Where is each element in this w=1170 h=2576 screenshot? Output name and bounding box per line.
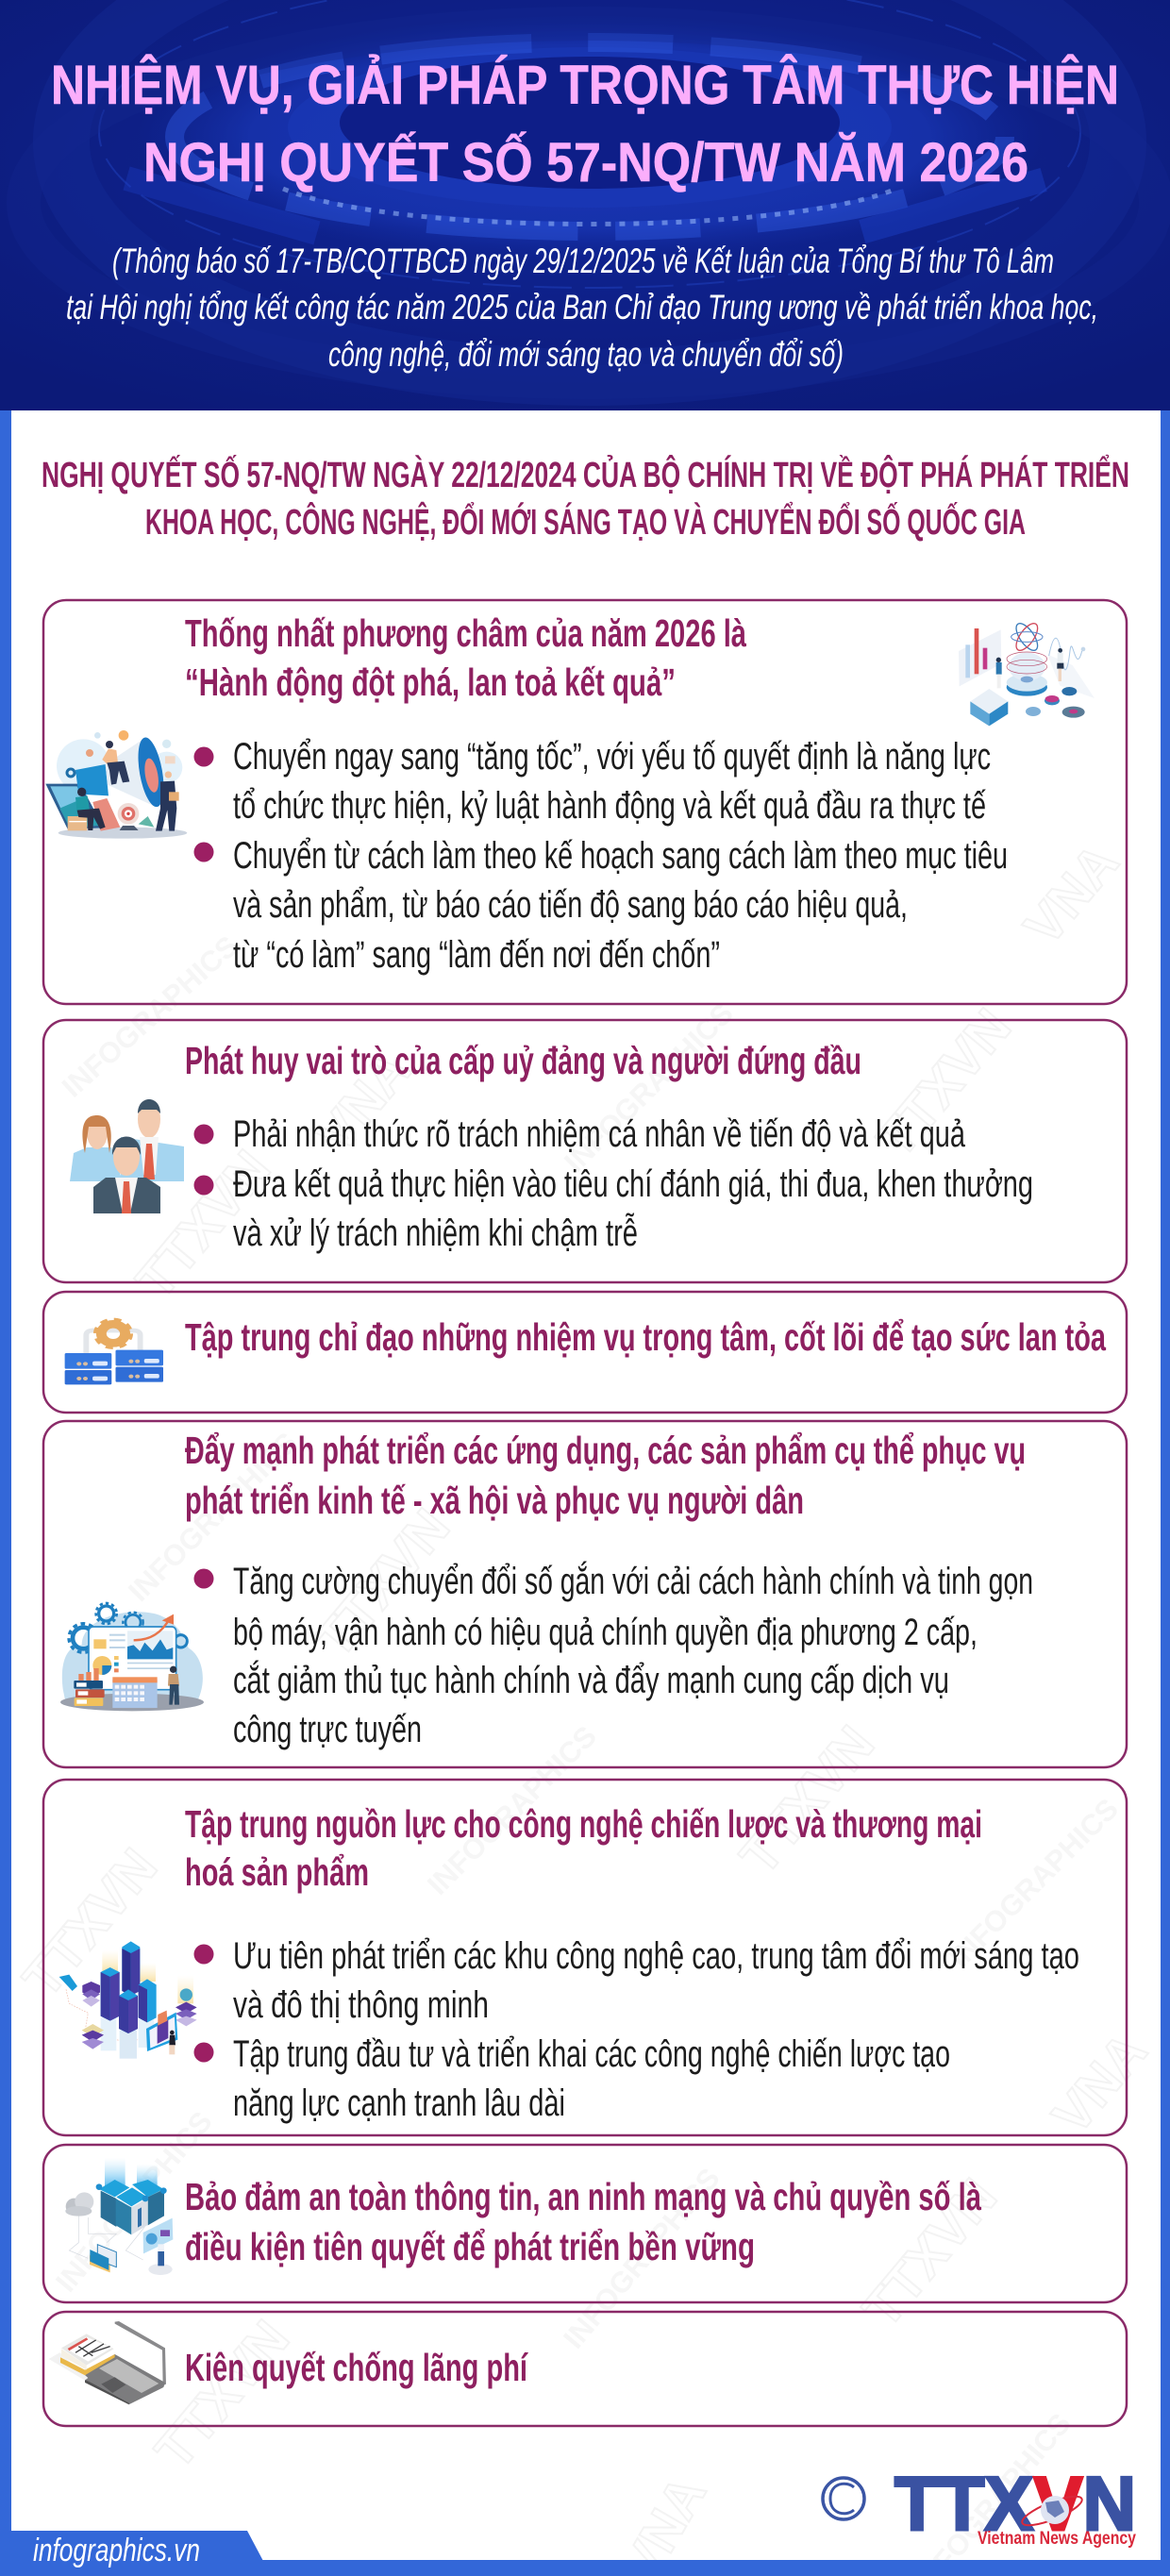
main title: NGHỊ QUYẾT SỐ 57-NQ/TW NĂM 2026 xyxy=(143,132,1028,193)
watermark pattern: INFOGRAPHICS xyxy=(56,929,244,1104)
panel 1 bullets xyxy=(194,736,1008,976)
panel 6 heading: điều kiện tiên quyết để phát triển bền vững xyxy=(185,2225,755,2268)
panel 6: an toàn thông tin xyxy=(43,2145,1127,2302)
panel 1 bullets: từ “có làm” sang “làm đến nơi đến chốn” xyxy=(233,934,720,976)
panel 4 heading: phát triển kinh tế - xã hội và phục vụ người dân xyxy=(185,1479,804,1522)
icon: smart city towers xyxy=(59,1941,197,2059)
watermark pattern: TTXVN xyxy=(728,1715,885,1885)
logo tagline: Vietnam News Agency xyxy=(978,2529,1136,2549)
icon: data center security xyxy=(65,2158,173,2275)
panel 1 heading: “Hành động đột phá, lan toả kết quả” xyxy=(185,661,676,704)
watermark pattern: INFOGRAPHICS xyxy=(557,2162,727,2355)
watermark pattern: INFOGRAPHICS xyxy=(943,1792,1125,1974)
icon: megaphone team xyxy=(45,730,187,839)
watermark pattern: TTXVN xyxy=(865,997,1022,1168)
main title xyxy=(51,55,1119,193)
logo globe xyxy=(1019,2491,1085,2531)
panel 5: công nghệ chiến lược xyxy=(43,1780,1127,2135)
icon: science platform xyxy=(959,620,1095,726)
copyright symbol xyxy=(823,2478,864,2519)
icon: servers and gear xyxy=(65,1320,163,1384)
TTXVN logo: TTXVN xyxy=(894,2462,1136,2547)
subtitle: công nghệ, đổi mới sáng tạo và chuyển đổi số) xyxy=(328,335,844,374)
panel 5 heading: hoá sản phẩm xyxy=(185,1850,369,1894)
panel 5 heading xyxy=(185,1802,982,1894)
panel 7: chống lãng phí xyxy=(43,2312,1127,2426)
watermark pattern: TTXVN xyxy=(125,1139,281,1310)
watermark pattern: TTXVN xyxy=(143,2309,300,2480)
panel 4 bullet xyxy=(194,1560,1033,1750)
icon: analytics dashboard xyxy=(60,1603,204,1711)
panel 1: phương châm 2026 xyxy=(43,600,1127,1004)
panel 5 bullets xyxy=(194,1935,1079,2124)
watermark pattern: INFOGRAPHICS xyxy=(421,1719,603,1901)
watermark pattern: TTXVN xyxy=(11,1837,168,2008)
watermark pattern: VNA xyxy=(305,1040,422,1163)
panel 5 bullets: và đô thị thông minh xyxy=(233,1984,489,2026)
panel 7 heading: Kiên quyết chống lãng phí xyxy=(185,2346,528,2389)
panel 4 heading xyxy=(185,1429,1026,1522)
site name: infographics.vn xyxy=(33,2533,200,2568)
watermark pattern: VNA xyxy=(1041,2021,1158,2145)
panel 1 bullets: và sản phẩm, từ báo cáo tiến độ sang báo cáo hiệu quả, xyxy=(233,884,908,926)
panel 4: ứng dụng, sản phẩm xyxy=(43,1421,1127,1767)
watermark pattern: INFOGRAPHICS xyxy=(122,1426,304,1608)
watermark pattern: INFOGRAPHICS xyxy=(49,2105,219,2299)
icon: three leaders xyxy=(70,1099,184,1213)
panel 1 heading xyxy=(185,611,746,704)
panel 4 bullet: công trực tuyến xyxy=(233,1709,422,1750)
panel 2: cấp uỷ và người đứng đầu xyxy=(43,1020,1127,1282)
panel 6 heading xyxy=(185,2175,981,2268)
watermark pattern xyxy=(11,832,1158,2576)
watermark pattern: TTXVN xyxy=(304,1497,460,1668)
footer site tab xyxy=(0,2531,264,2576)
panel 2 bullets: và xử lý trách nhiệm khi chậm trễ xyxy=(233,1212,638,1254)
icon: laptop and papers xyxy=(49,2321,166,2404)
header background with tech rings xyxy=(0,0,1170,410)
header banner xyxy=(0,0,1170,410)
panel 2 bullets xyxy=(194,1113,1033,1254)
panel 3: nhiệm vụ trọng tâm xyxy=(43,1292,1127,1413)
panel 5 bullets: năng lực cạnh tranh lâu dài xyxy=(233,2083,565,2124)
panel 2 heading: Phát huy vai trò của cấp uỷ đảng và người đứng đầu xyxy=(185,1039,861,1082)
section heading xyxy=(42,453,1129,543)
panel 1 heading: Thống nhất phương châm của năm 2026 là xyxy=(185,611,746,655)
subtitle xyxy=(66,242,1098,374)
watermark pattern: INFOGRAPHICS xyxy=(558,996,740,1179)
watermark pattern: TTXVN xyxy=(851,2167,1008,2338)
watermark pattern: VNA xyxy=(1012,832,1129,956)
